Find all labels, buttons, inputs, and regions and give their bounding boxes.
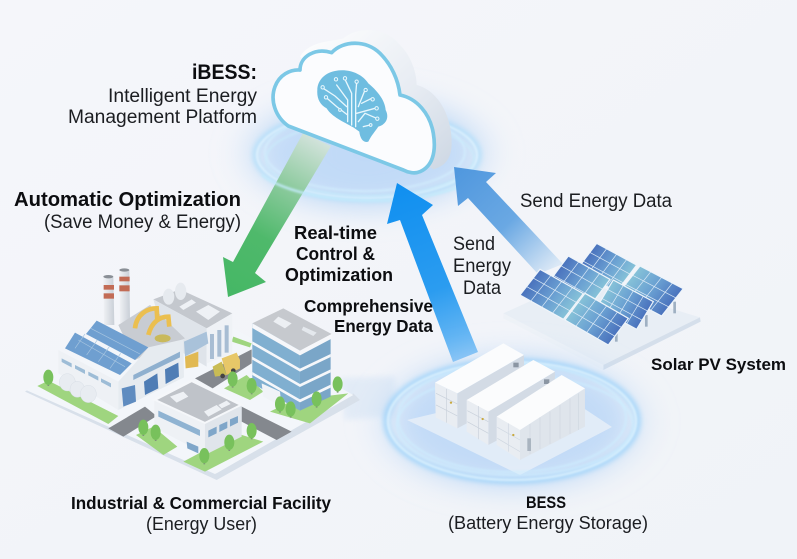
label: industrial facility bbox=[71, 493, 331, 534]
solar panel posts bbox=[615, 302, 676, 342]
label: industrial facility: Industrial & Commercial Facility bbox=[71, 493, 331, 513]
heading: iBESS: iBESS: bbox=[192, 60, 257, 84]
blue arrow: comprehensive energy data bbox=[387, 183, 478, 362]
cloud face bbox=[273, 43, 434, 173]
cloud extrusion bbox=[300, 30, 452, 169]
facility illustration bbox=[25, 268, 360, 480]
heading: iBESS: Management Platform bbox=[68, 107, 257, 128]
label: automatic optimization bbox=[14, 188, 241, 233]
label: send energy data (BESS): Data bbox=[463, 278, 501, 299]
heading: iBESS: Intelligent Energy bbox=[108, 86, 257, 107]
label: real-time control: Real-time bbox=[294, 223, 377, 243]
heading: iBESS bbox=[68, 60, 257, 128]
back utility building bbox=[153, 283, 232, 367]
label: send energy data (solar): Send Energy Data bbox=[520, 191, 672, 212]
label: comprehensive energy data: Comprehensive bbox=[304, 296, 433, 316]
label: automatic optimization: Automatic Optimization bbox=[14, 188, 241, 211]
solar PV system bbox=[503, 243, 701, 370]
cloud glow and energy rings bbox=[227, 85, 507, 221]
brain icon bbox=[317, 70, 387, 142]
label: BESS: BESS bbox=[526, 493, 566, 512]
container 3 bbox=[497, 375, 585, 460]
faint light band between facility and BESS bbox=[340, 376, 395, 420]
facility ground plate bbox=[25, 388, 360, 480]
storage tanks bbox=[59, 374, 96, 403]
label: comprehensive energy data: Energy Data bbox=[334, 316, 433, 336]
battery containers bbox=[435, 343, 585, 460]
delivery truck bbox=[213, 353, 240, 378]
chimneys bbox=[103, 268, 130, 325]
green arrow: automatic optimization bbox=[223, 133, 331, 297]
cloud icon with brain bbox=[273, 30, 452, 173]
lawns bbox=[37, 337, 348, 472]
solar panels bbox=[520, 243, 683, 345]
trees bbox=[43, 370, 343, 464]
label: solar PV system: Solar PV System bbox=[651, 355, 786, 374]
light blue arrow: solar energy data bbox=[454, 167, 563, 274]
label: BESS bbox=[448, 493, 648, 533]
label: real-time control bbox=[285, 223, 393, 285]
label: BESS: (Battery Energy Storage) bbox=[448, 512, 648, 533]
label: industrial facility: (Energy User) bbox=[146, 514, 257, 534]
label: send energy data (BESS) bbox=[453, 234, 511, 299]
label: comprehensive energy data bbox=[304, 296, 433, 336]
label: real-time control: Optimization bbox=[285, 265, 393, 285]
factory hall bbox=[58, 305, 208, 410]
solar ground plate bbox=[503, 280, 700, 367]
front arc of cloud ring bbox=[262, 175, 478, 201]
label: send energy data (BESS): Energy bbox=[453, 256, 511, 277]
office tower bbox=[252, 308, 332, 411]
label: send energy data (BESS): Send bbox=[453, 234, 495, 255]
label: real-time control: Control & bbox=[296, 244, 375, 264]
container 1 bbox=[435, 343, 524, 428]
container 2 bbox=[467, 360, 555, 445]
BESS glow and energy rings bbox=[362, 342, 662, 502]
label: automatic optimization: (Save Money & Energy) bbox=[44, 212, 241, 233]
small office bbox=[154, 381, 242, 455]
roads bbox=[108, 349, 292, 440]
